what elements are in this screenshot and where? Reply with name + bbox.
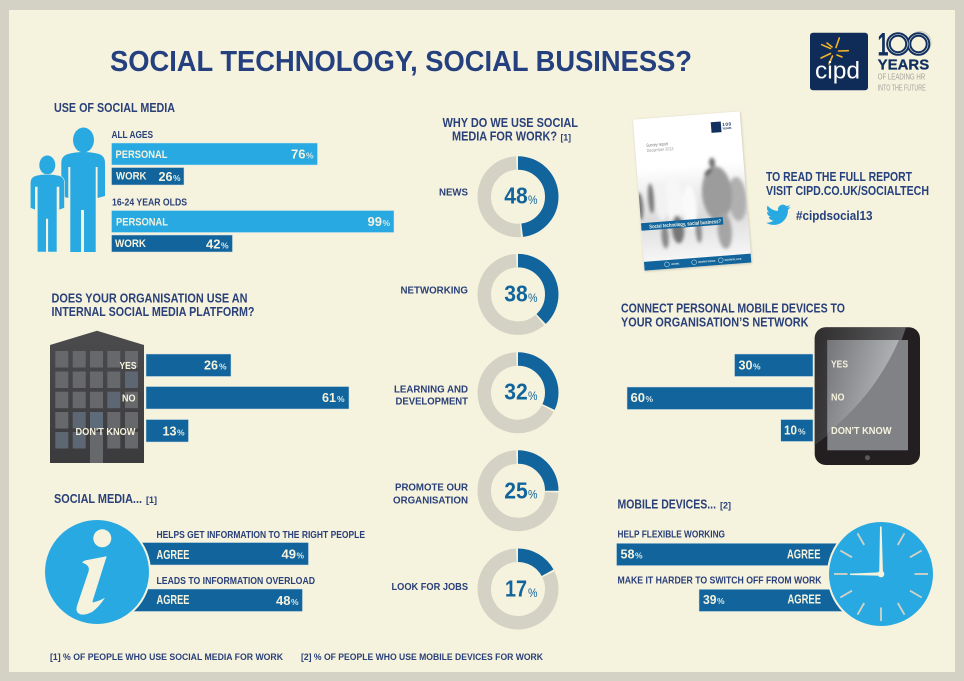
panel: use of social media	[30, 101, 394, 252]
logo: cipd square: cipd	[815, 58, 860, 85]
label: all ages: ALL AGES	[112, 130, 153, 141]
bar: flexible working 58%: 58	[620, 546, 634, 562]
bar: overload agree 48%: AGREE	[156, 593, 190, 607]
donut: networking 38%: 38	[504, 281, 528, 307]
label: 16-24 year olds: 16-24 YEAR OLDS	[112, 198, 187, 209]
donut: look for jobs 17%: 17	[505, 576, 527, 602]
bar: all ages work 26%	[112, 168, 184, 185]
bar: all ages work 26%: %	[173, 173, 181, 183]
label: leads to information overload: LEADS TO INFORMATION OVERLOAD	[156, 576, 315, 587]
logo: 100 years: INTO THE FUTURE	[878, 82, 926, 92]
donut: promote our organisation 25%: %	[528, 490, 538, 502]
panel: mobile devices agreement	[616, 498, 935, 628]
heading: [1]	[560, 132, 571, 142]
footnote 1: [1] % OF PEOPLE WHO USE SOCIAL MEDIA FOR WORK	[50, 652, 283, 663]
bar: don't know 13%	[146, 420, 188, 442]
panel: why do we use social media	[392, 116, 578, 634]
bar: 16-24 work 42%: %	[221, 240, 229, 250]
call to action text	[766, 170, 929, 198]
donut: look for jobs 17%: %	[528, 588, 538, 600]
bar: no 60%	[627, 387, 813, 410]
icon: office building: DON'T KNOW	[76, 427, 136, 438]
bar: don't know 13%: 13	[162, 424, 176, 438]
bar: no 60%: 60	[630, 390, 645, 405]
bar: 16-24 work 42%: 42	[206, 236, 220, 252]
donut: learning and development 32%: 32	[504, 378, 528, 404]
donut: look for jobs 17%: LOOK FOR JOBS	[392, 582, 468, 593]
bar: 16-24 personal 99%: 99	[368, 214, 382, 229]
bar: 16-24 personal 99%: %	[382, 218, 390, 228]
bar: yes 30%: 30	[738, 358, 752, 372]
bar: don't know 10%: 10	[784, 422, 797, 438]
footnote 2: [2] % OF PEOPLE WHO USE MOBILE DEVICES FOR WORK	[301, 652, 543, 663]
title: SOCIAL TECHNOLOGY, SOCIAL BUSINESS?	[110, 46, 692, 78]
cover footer band: WORKFORCE	[698, 259, 716, 264]
icon: tablet: DON'T KNOW	[831, 426, 892, 437]
hashtag: #cipdsocial13	[796, 208, 872, 223]
bar: no 61%: 61	[322, 390, 336, 405]
donut: promote our organisation 25%: ORGANISATION	[393, 495, 468, 506]
donut: promote our organisation 25%: 25	[504, 477, 528, 503]
heading: WHY DO WE USE SOCIAL	[442, 116, 578, 130]
bar: yes 26%	[146, 354, 231, 376]
bar: 16-24 personal 99%: PERSONAL	[116, 216, 168, 228]
icon: twitter bird	[766, 205, 790, 225]
bar: switch off 39%: AGREE	[788, 592, 821, 606]
cover footer band: WORKPLACE	[724, 257, 742, 262]
cover photo: blurred crowd	[633, 155, 751, 262]
heading	[52, 292, 254, 319]
bar: helps agree 49%: AGREE	[156, 548, 190, 562]
heading: [2]	[720, 500, 731, 510]
bar: switch off 39%: %	[717, 596, 725, 606]
bar: all ages personal 76%: %	[306, 150, 314, 160]
call to action text: VISIT CIPD.CO.UK/SOCIALTECH	[766, 184, 929, 198]
donut: news 48%	[439, 161, 554, 233]
donut: learning and development 32%: %	[528, 391, 538, 403]
heading: MOBILE DEVICES...	[618, 498, 716, 512]
icon: information	[43, 518, 151, 626]
icon: office building: NO	[122, 394, 136, 404]
bar: no 61%: %	[337, 394, 345, 404]
heading: INTERNAL SOCIAL MEDIA PLATFORM?	[52, 305, 254, 319]
donut: learning and development 32%: LEARNING AND	[394, 385, 468, 396]
heading: YOUR ORGANISATION’S NETWORK	[621, 316, 808, 330]
donut: news 48%: NEWS	[439, 188, 468, 199]
bar: all ages personal 76%: PERSONAL	[116, 149, 168, 161]
panel: social media agreement	[43, 492, 365, 626]
cover title band	[641, 217, 723, 231]
heading: CONNECT PERSONAL MOBILE DEVICES TO	[621, 302, 845, 316]
logo: 100 years: YEARS	[878, 58, 930, 74]
bar: no 61%	[146, 386, 349, 409]
icon: office building: YES	[120, 361, 137, 372]
bar: switch off 39%	[699, 589, 851, 612]
heading: [1]	[146, 495, 157, 505]
bar: yes 30%	[734, 354, 813, 376]
cover date: December 2013	[646, 146, 674, 153]
bar: yes 30%: %	[753, 362, 761, 372]
heading: DOES YOUR ORGANISATION USE AN	[52, 292, 248, 306]
cover text: Survey report	[646, 141, 669, 148]
icon: tablet	[815, 327, 920, 465]
bar: flexible working 58%: %	[635, 550, 643, 560]
bar: yes 26%: 26	[204, 358, 218, 372]
cover logo: YEARS	[722, 126, 732, 131]
label: make it harder: MAKE IT HARDER TO SWITCH OFF FROM WORK	[618, 576, 822, 587]
donut: news 48%: 48	[504, 182, 528, 208]
call to action text: TO READ THE FULL REPORT	[766, 170, 912, 184]
icon: people	[30, 128, 105, 252]
bar: overload agree 48%: %	[291, 597, 299, 607]
heading: USE OF SOCIAL MEDIA	[54, 101, 175, 115]
heading	[442, 116, 578, 144]
bar: helps agree 49%	[130, 542, 308, 565]
icon: office building	[50, 331, 144, 463]
donut: networking 38%: %	[528, 293, 538, 305]
icon: tablet: YES	[831, 360, 848, 370]
cover title band: Social technology, social business?	[649, 219, 721, 230]
bar: 16-24 work 42%	[112, 235, 232, 252]
icon: tablet: NO	[831, 393, 845, 404]
bar: don't know 10%: %	[798, 426, 806, 436]
panel: connect personal mobile devices	[621, 302, 920, 465]
bar: don't know 10%	[781, 420, 813, 442]
cover logo: 100	[722, 121, 732, 127]
bar: all ages work 26%: 26	[158, 169, 172, 184]
bar: no 60%: %	[646, 394, 654, 404]
donut: promote our organisation 25%	[393, 455, 553, 526]
panel: internal social media platform	[50, 292, 349, 463]
heading	[621, 302, 845, 330]
bar: 16-24 work 42%: WORK	[115, 238, 146, 250]
donut: networking 38%: NETWORKING	[400, 286, 468, 297]
icon: clock	[827, 520, 935, 628]
donut: look for jobs 17%	[392, 544, 563, 634]
heading: SOCIAL MEDIA...	[54, 492, 142, 506]
bar: overload agree 48%: 48	[276, 593, 290, 608]
logo: 100 years	[878, 26, 931, 92]
bar: all ages work 26%: WORK	[116, 170, 147, 182]
bar: yes 26%: %	[219, 362, 227, 372]
label: help flexible working: HELP FLEXIBLE WORKING	[618, 530, 725, 540]
logo: 100 years: OF LEADING HR	[878, 72, 925, 82]
label: helps get information: HELPS GET INFORMATION TO THE RIGHT PEOPLE	[156, 530, 365, 541]
bar: flexible working 58%: AGREE	[787, 548, 820, 562]
bar: switch off 39%: 39	[703, 592, 716, 607]
bar: helps agree 49%: 49	[282, 546, 296, 562]
logo: 100 years: 1	[878, 26, 888, 62]
donut: news 48%: %	[528, 195, 538, 207]
donut: promote our organisation 25%: PROMOTE OUR	[395, 483, 469, 494]
bar: all ages personal 76%: 76	[291, 146, 306, 162]
cover footer band: WORK	[671, 261, 680, 266]
donut: learning and development 32%: DEVELOPMENT	[396, 396, 468, 408]
report cover	[630, 111, 752, 272]
bar: all ages personal 76%	[112, 143, 318, 165]
bar: don't know 13%: %	[177, 428, 185, 438]
bar: helps agree 49%: %	[296, 550, 304, 560]
bar: overload agree 48%	[130, 589, 302, 612]
cover footer band	[644, 254, 751, 271]
donut: networking 38%	[400, 247, 566, 342]
logo: CIPD 100 years	[810, 26, 931, 92]
cover logo	[711, 121, 732, 133]
bar: flexible working 58%	[616, 543, 852, 566]
heading: MEDIA FOR WORK?	[452, 130, 557, 144]
donut: learning and development 32%	[394, 347, 564, 438]
bar: 16-24 personal 99%	[112, 210, 394, 232]
